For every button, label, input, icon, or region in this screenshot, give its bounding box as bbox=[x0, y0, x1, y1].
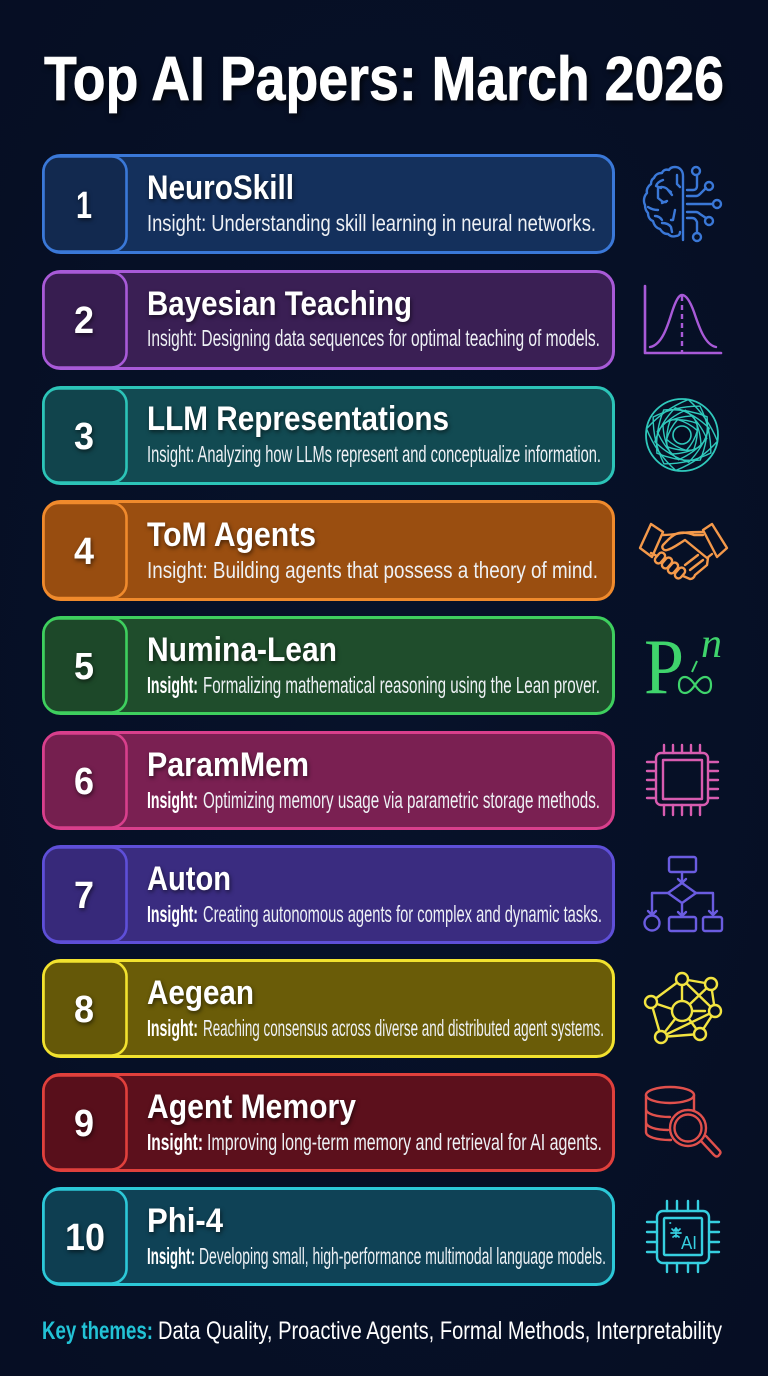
name: ParamMem bbox=[147, 746, 309, 784]
insight: Insight: bbox=[147, 1129, 203, 1155]
number 7: 7 bbox=[74, 875, 94, 917]
icon: database search bbox=[646, 1087, 720, 1156]
insight: Insight: bbox=[147, 1015, 198, 1041]
icon: P infinity n formula bbox=[644, 621, 722, 710]
icon: brain circuit bbox=[644, 167, 721, 241]
insight: Insight: bbox=[147, 901, 198, 927]
panel: paper 10 Phi-4 bbox=[44, 1188, 614, 1284]
name: ToM Agents bbox=[147, 516, 316, 554]
number 3: 3 bbox=[74, 416, 94, 458]
icon: network graph bbox=[645, 973, 721, 1043]
icon: handshake bbox=[640, 524, 727, 580]
panel: paper 3 LLM Representations bbox=[44, 388, 614, 484]
icon: memory chip bbox=[647, 745, 718, 815]
icon: P infinity n formula: P bbox=[644, 623, 684, 710]
insight: Insight: bbox=[147, 1243, 195, 1269]
name: Bayesian Teaching bbox=[147, 285, 412, 323]
insight: Insight: Understanding skill learning in neural networks. bbox=[147, 210, 596, 236]
panel: paper 2 Bayesian Teaching bbox=[44, 272, 614, 368]
name: LLM Representations bbox=[147, 400, 449, 438]
panel: paper 4 ToM Agents bbox=[44, 502, 614, 600]
icon: P infinity n formula: n bbox=[701, 621, 722, 667]
number 6: 6 bbox=[74, 761, 94, 803]
name: Phi-4 bbox=[147, 1202, 223, 1240]
number 4: 4 bbox=[74, 531, 94, 573]
icon: spiral sphere bbox=[635, 388, 729, 482]
number 1: 1 bbox=[76, 185, 92, 227]
icon: AI chip bbox=[647, 1201, 719, 1272]
number 2: 2 bbox=[74, 300, 94, 342]
insight: Insight: bbox=[147, 672, 198, 698]
footer: key themes: Key themes: bbox=[42, 1317, 153, 1345]
panel: paper 1 NeuroSkill bbox=[44, 156, 614, 252]
panel: paper 5 Numina-Lean bbox=[44, 618, 614, 714]
number 5: 5 bbox=[74, 646, 94, 688]
panel: paper 7 Auton bbox=[44, 846, 614, 942]
number 8: 8 bbox=[74, 989, 94, 1031]
number 9: 9 bbox=[74, 1103, 94, 1145]
number 10: 10 bbox=[65, 1217, 105, 1259]
name: Agent Memory bbox=[147, 1088, 356, 1126]
insight: Insight: Building agents that possess a theory of mind. bbox=[147, 557, 598, 583]
panel: paper 6 ParamMem bbox=[44, 732, 614, 828]
icon: bell curve bbox=[645, 286, 721, 353]
icon: AI chip: AI bbox=[681, 1233, 697, 1253]
icon: flowchart bbox=[644, 857, 722, 931]
name: Numina-Lean bbox=[147, 631, 337, 669]
panel: paper 9 Agent Memory bbox=[44, 1074, 614, 1170]
insight: Insight: bbox=[147, 787, 198, 813]
name: Auton bbox=[147, 860, 231, 898]
panel: paper 8 Aegean bbox=[44, 960, 614, 1056]
panel: paper 9 Agent Memory: Improving long-term memory and retrieval for AI agents. bbox=[207, 1129, 602, 1155]
name: NeuroSkill bbox=[147, 169, 294, 207]
name: Aegean bbox=[147, 974, 254, 1012]
